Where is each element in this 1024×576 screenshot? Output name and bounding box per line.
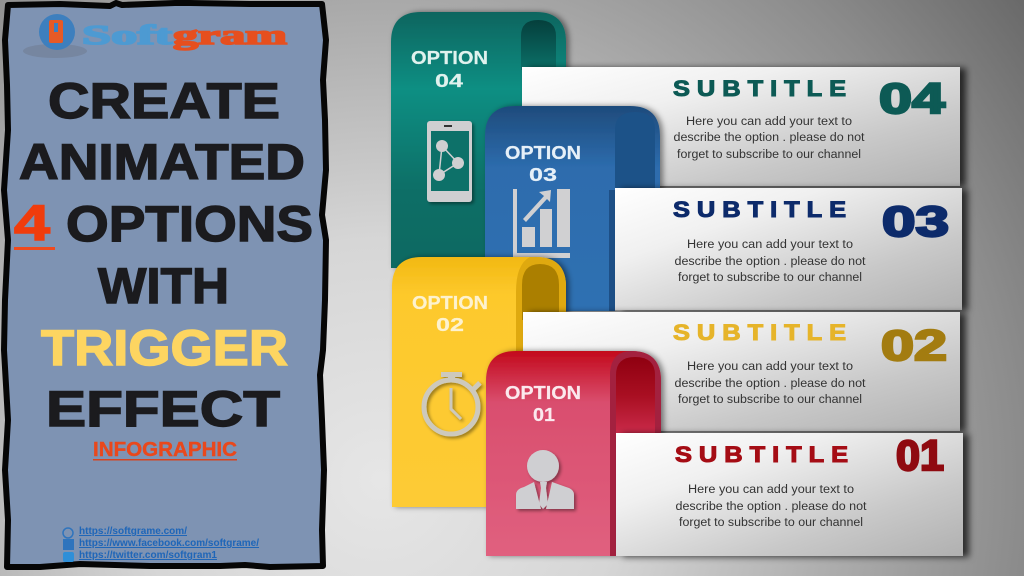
panel: subtitle 01: forget to subscribe to our channel <box>679 515 863 529</box>
icon: bar chart <box>513 189 570 259</box>
panel: subtitle 02: describe the option . please do not <box>674 376 866 390</box>
panel: subtitle 01 <box>616 432 963 556</box>
label: option 03: 03 <box>529 165 557 185</box>
label: option 02: 02 <box>436 315 464 335</box>
heading: main title: OPTIONS <box>66 196 313 252</box>
panel: subtitle 03: Here you can add your text to <box>687 237 853 251</box>
panel: title sidebar <box>4 3 326 567</box>
label: option 02 <box>412 293 488 335</box>
logo: Softgram <box>23 14 288 58</box>
links list <box>63 526 259 562</box>
panel: subtitle 02: 02 <box>881 322 947 370</box>
label: option 03: OPTION <box>505 143 581 163</box>
panel: subtitle 03: 03 <box>882 198 949 246</box>
links list: https://www.facebook.com/softgrame/ <box>79 538 259 549</box>
label: option 04: 04 <box>435 71 463 91</box>
heading: main title <box>14 73 313 437</box>
ribbon: option 02 <box>392 257 566 507</box>
heading: main title: ANIMATED <box>19 134 305 190</box>
panel: subtitle 02: forget to subscribe to our channel <box>678 392 862 406</box>
panel: subtitle 03: forget to subscribe to our channel <box>678 270 862 284</box>
logo: Softgram: gram <box>173 20 288 50</box>
panel: subtitle 02 <box>523 312 960 431</box>
logo: Softgram: Soft <box>82 20 172 50</box>
heading: main title: TRIGGER <box>41 320 288 376</box>
panel: subtitle 03: SUBTITLE <box>673 197 853 222</box>
links list: https://twitter.com/softgram1 <box>79 550 217 561</box>
panel: subtitle 02: Here you can add your text to <box>687 359 853 373</box>
icon: phone network <box>427 121 472 202</box>
panel: subtitle 04: SUBTITLE <box>673 76 853 101</box>
label: option 02: OPTION <box>412 293 488 313</box>
heading: main title: 4 <box>14 195 50 251</box>
links list: https://softgrame.com/ <box>79 526 187 537</box>
label: option 04 <box>411 48 488 91</box>
panel: subtitle 04: describe the option . please do not <box>674 130 865 144</box>
panel: subtitle 02: SUBTITLE <box>673 320 853 345</box>
panel: subtitle 03 <box>615 188 962 310</box>
ribbon: option 04 <box>391 12 566 268</box>
label: option 01: OPTION <box>505 383 581 403</box>
heading: main title: WITH <box>98 258 229 314</box>
panel: subtitle 04: Here you can add your text to <box>686 114 852 128</box>
heading: main title: CREATE <box>48 73 280 129</box>
label: option 03 <box>505 143 581 185</box>
panel: subtitle 03: describe the option . please do not <box>674 254 866 268</box>
icon: businessman <box>516 450 574 509</box>
panel: subtitle 04: forget to subscribe to our channel <box>677 147 861 161</box>
label: option 04: OPTION <box>411 48 488 68</box>
heading: main title: EFFECT <box>46 381 280 437</box>
ribbon: option 03 <box>485 106 660 311</box>
panel: subtitle 04 <box>522 67 960 186</box>
panel: subtitle 01: Here you can add your text to <box>688 482 854 496</box>
panel: subtitle 01: describe the option . please do not <box>676 499 867 513</box>
icon: stopwatch <box>424 372 482 434</box>
label: option 01: 01 <box>533 405 555 425</box>
label: option 01 <box>505 383 581 425</box>
panel: subtitle 01: 01 <box>896 432 944 480</box>
ribbon: option 01 <box>486 351 661 556</box>
panel: subtitle 01: SUBTITLE <box>675 442 855 467</box>
subheading: infographic: INFOGRAPHIC <box>93 439 237 461</box>
panel: subtitle 04: 04 <box>879 75 945 123</box>
